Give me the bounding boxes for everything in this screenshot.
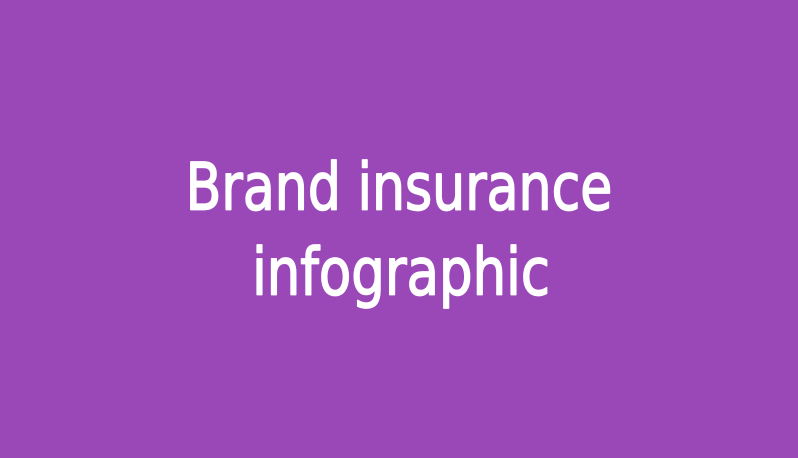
title: Brand insurance	[186, 149, 612, 225]
title: infographic	[252, 234, 550, 310]
title	[186, 149, 612, 310]
